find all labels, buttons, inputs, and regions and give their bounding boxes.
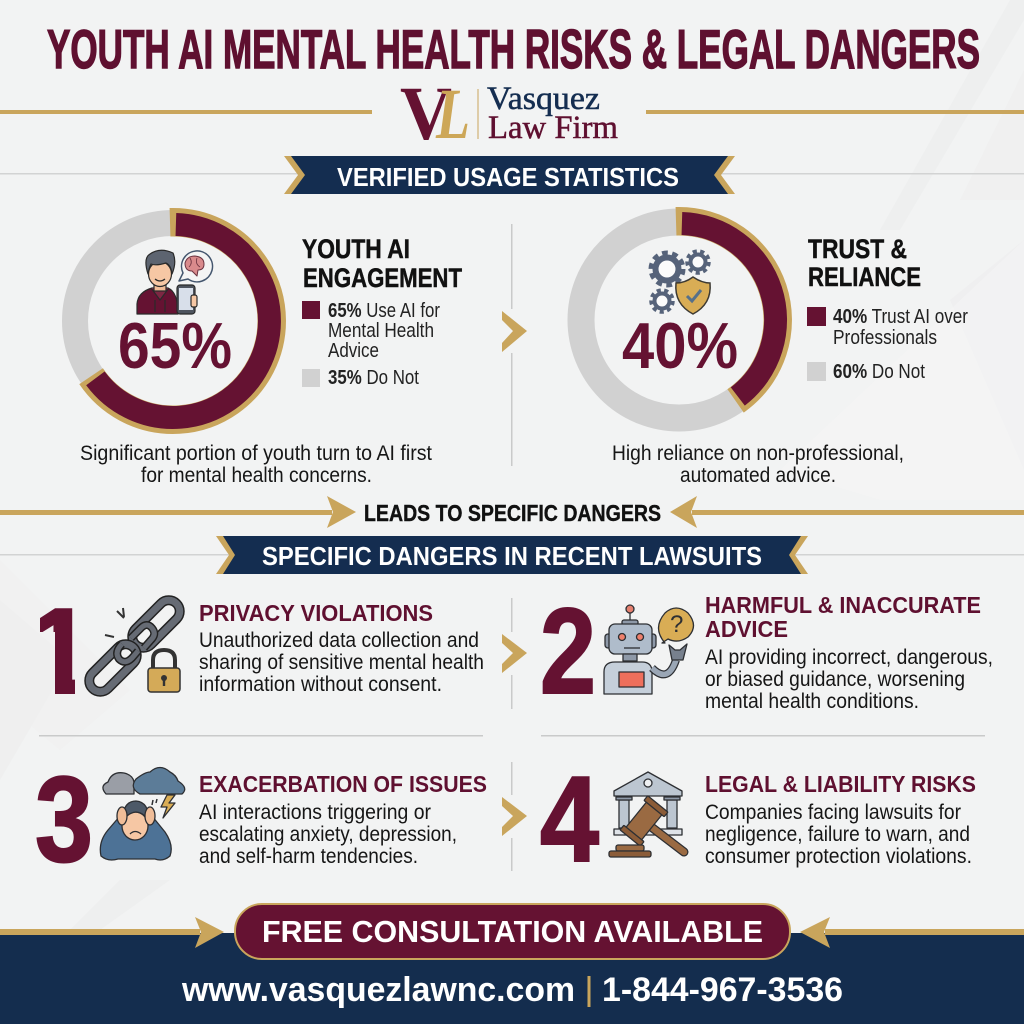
- description: or biased guidance, worsening: [705, 668, 965, 691]
- heading: [808, 234, 921, 292]
- legend: [302, 300, 440, 389]
- legend: Professionals: [833, 327, 937, 349]
- description: negligence, failure to warn, and: [705, 823, 970, 846]
- caption: for mental health concerns.: [141, 464, 372, 487]
- footer band: [0, 904, 1024, 1024]
- legend: 60% Do Not: [833, 361, 925, 383]
- description: [705, 801, 972, 868]
- caption: [80, 442, 432, 487]
- description: Unauthorized data collection and: [199, 629, 479, 652]
- arrow: chevron: [502, 797, 527, 836]
- description: AI interactions triggering or: [199, 801, 431, 824]
- heading: LEGAL & LIABILITY RISKS: [705, 771, 976, 797]
- caption: automated advice.: [680, 464, 836, 487]
- logo: Vasquez Law Firm: L: [435, 74, 470, 154]
- contact details: 1-844-967-3536: [602, 971, 843, 1009]
- description: sharing of sensitive mental health: [199, 651, 484, 674]
- number 3: 3: [35, 751, 93, 887]
- caption: [612, 442, 904, 487]
- icon: courthouse and gavel: [609, 772, 684, 857]
- logo: Vasquez Law Firm: [0, 72, 1024, 156]
- arrow: right into pill: [800, 917, 830, 948]
- arrow: left into pill: [195, 917, 224, 948]
- icon: robot with question bubble: [604, 605, 694, 694]
- call to action pill: [235, 904, 790, 959]
- number 2: 2: [540, 583, 596, 719]
- logo: Vasquez Law Firm: Vasquez: [487, 81, 600, 117]
- icon: youth with phone and brain bubble: [137, 250, 213, 314]
- banner: specific dangers in recent lawsuits: SPECIFIC DANGERS IN RECENT LAWSUITS: [262, 541, 762, 571]
- heading: YOUTH AI: [302, 234, 410, 264]
- heading: EXACERBATION OF ISSUES: [199, 771, 487, 797]
- legend: Mental Health: [328, 320, 434, 342]
- description: Companies facing lawsuits for: [705, 801, 961, 824]
- panel: trust and reliance: [581, 221, 968, 487]
- banner: verified usage statistics: VERIFIED USAGE STATISTICS: [337, 162, 679, 192]
- panel: danger 3 exacerbation of issues: [35, 751, 487, 887]
- description: mental health conditions.: [705, 690, 919, 713]
- description: escalating anxiety, depression,: [199, 823, 457, 846]
- donut chart: 65%: 65%: [118, 309, 232, 382]
- transition: leads to specific dangers: [0, 496, 1024, 528]
- description: information without consent.: [199, 673, 442, 696]
- transition: leads to specific dangers: LEADS TO SPECIFIC DANGERS: [364, 500, 661, 526]
- panel: danger 2 harmful advice: [540, 583, 993, 719]
- legend: 40% Trust AI over: [833, 306, 968, 328]
- description: [705, 646, 993, 713]
- call to action pill: FREE CONSULTATION AVAILABLE: [262, 914, 763, 949]
- heading: HARMFUL & INACCURATE: [705, 592, 981, 618]
- legend: [807, 306, 968, 383]
- heading: [302, 234, 462, 293]
- description: consumer protection violations.: [705, 845, 972, 868]
- donut chart: 40%: 40%: [622, 309, 738, 382]
- donut chart: 65%: [75, 222, 272, 420]
- legend: Advice: [328, 340, 379, 362]
- caption: High reliance on non-professional,: [612, 442, 904, 465]
- heading: ENGAGEMENT: [303, 263, 462, 293]
- icon: robot with question bubble: ?: [670, 611, 683, 638]
- arrow: chevron: [502, 634, 527, 673]
- panel: danger 4 legal and liability risks: [540, 751, 976, 887]
- heading: TRUST &: [808, 234, 907, 264]
- icon: distressed person under storm clouds: [100, 768, 185, 860]
- heading: RELIANCE: [808, 262, 921, 292]
- banner: verified usage statistics: [284, 156, 735, 194]
- description: [199, 629, 484, 696]
- logo: Vasquez Law Firm: Law Firm: [488, 110, 618, 146]
- icon: gears and shield: [652, 252, 710, 314]
- legend: 35% Do Not: [328, 367, 419, 389]
- donut chart: 40%: [581, 221, 778, 418]
- number 4: 4: [540, 751, 599, 887]
- heading: [705, 592, 981, 642]
- description: and self-harm tendencies.: [199, 845, 418, 868]
- arrow: chevron: [502, 311, 527, 352]
- contact details: [181, 971, 843, 1009]
- panel: youth AI engagement: [75, 222, 462, 487]
- legend: 65% Use AI for: [328, 300, 440, 322]
- heading: ADVICE: [705, 616, 788, 642]
- panel: danger 1 privacy violations: [40, 595, 483, 697]
- contact details: www.vasquezlawnc.com: [181, 971, 575, 1009]
- number 1: 1: [26, 583, 94, 719]
- caption: Significant portion of youth turn to AI first: [80, 442, 432, 465]
- icon: broken chain and padlock: [85, 596, 184, 696]
- logo: Vasquez Law Firm: V: [400, 72, 452, 156]
- heading: PRIVACY VIOLATIONS: [199, 600, 433, 626]
- description: [199, 801, 457, 868]
- description: AI providing incorrect, dangerous,: [705, 646, 993, 669]
